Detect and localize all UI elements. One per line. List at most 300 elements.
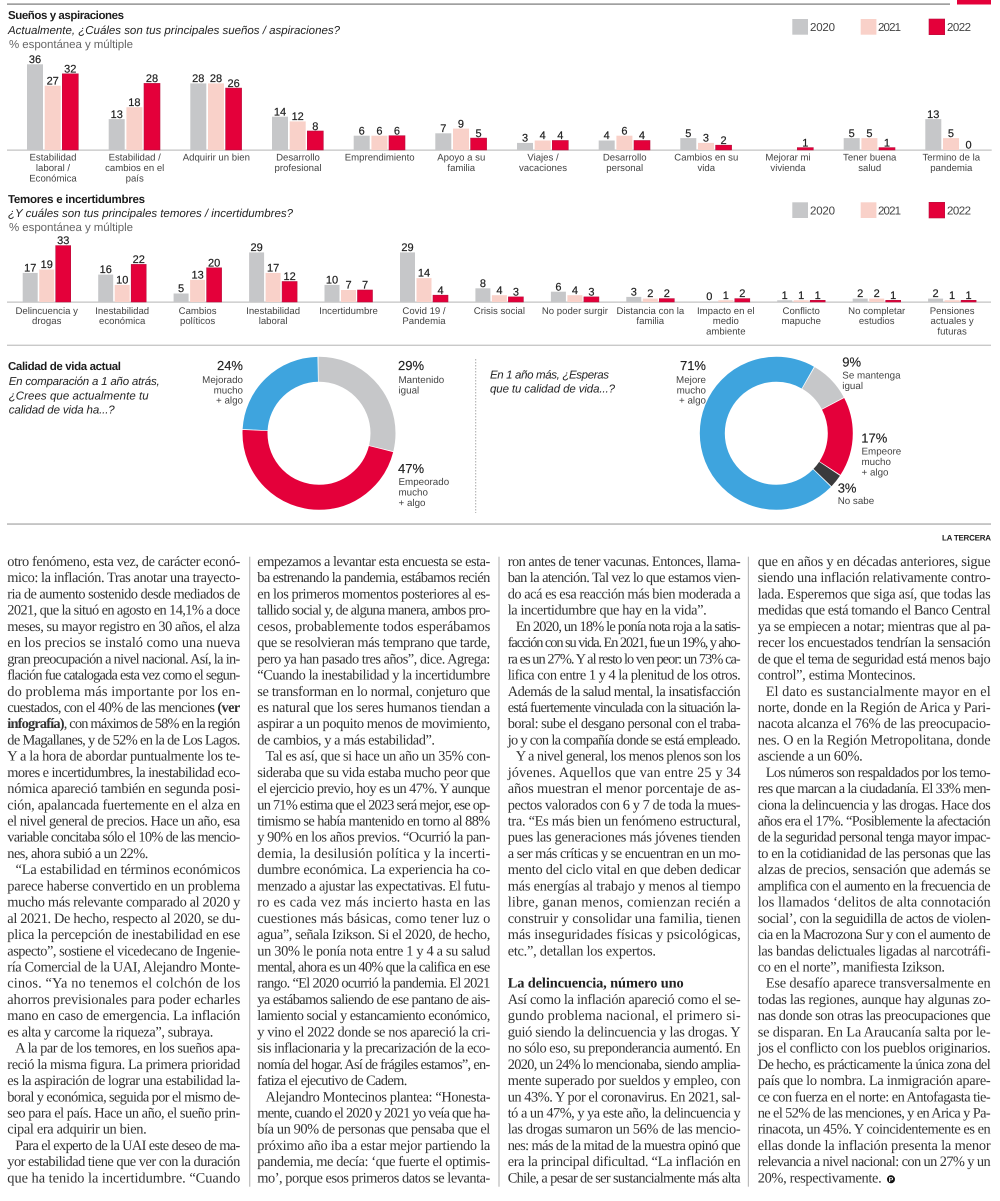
bars: Termino de la pandemia: pandemia (930, 163, 973, 174)
bars: Viajes / vacaciones (517, 130, 568, 174)
label: 24% mejorado: + algo (216, 396, 244, 406)
label: 3% no sabe (838, 480, 875, 507)
bars: Mejorar mi vivienda: Mejorar mi (765, 152, 811, 164)
article column 3: guió siendo la delincuencia y las drogas. Y (508, 1024, 741, 1040)
bars: Desarrollo profesional: profesional (275, 163, 321, 174)
article column 2: mente, cuando el 2020 y 2021 yo veía que ha- (257, 1106, 491, 1122)
heading: temores e incertidumbres: Temores e incertidumbres (8, 194, 145, 206)
bars: Conflicto mapuche (777, 290, 825, 327)
article column 4: siendo una inflación relativamente contro- (758, 570, 991, 586)
article column 1: plica la percepción de inestabilidad en ese (7, 927, 240, 943)
bars: No poder surgir: No poder surgir (542, 306, 609, 317)
red top tab (957, 0, 991, 4)
article column 3: años muestran el menor porcentaje de as- (508, 781, 741, 797)
article column 1: meses, su mayor registro en 30 años, el alza (7, 619, 241, 635)
article column 3: ban la atención. Tal vez lo que estamos vien- (508, 570, 741, 586)
article column 4: nacota alcanza el 76% de las preocupacio- (758, 716, 991, 732)
bars: Adquirir un bien (183, 73, 250, 164)
article column 3: 2020, un 24% lo mencionaba, siendo amplia- (508, 1057, 741, 1073)
article column 2: en los primeros momentos posteriores al es- (257, 586, 491, 602)
bars: Distancia con la familia (616, 286, 685, 327)
article column 3: jóvenes. Aquellos que van entre 25 y 34 (507, 765, 741, 781)
article column 4: Ese desafío aparece transversalmente en (766, 976, 991, 992)
bars: Delincuencia y drogas: 17 (24, 262, 36, 274)
bars: Inestabilidad económica: económica (99, 316, 146, 327)
bars: Covid 19 / Pandemia: Pandemia (402, 316, 446, 327)
donut chart: calidad actual (255, 369, 383, 497)
bars: Estabilidad cambios en el país: cambios en el (105, 163, 164, 174)
article column 4: recer los encuestados tendrían la sensación (758, 635, 991, 651)
bars: Termino de la pandemia: 13 (927, 109, 939, 121)
label: 9% se mantenga: Se mantenga (842, 370, 901, 382)
article column 3 (507, 554, 741, 1186)
bars: Inestabilidad laboral: laboral (259, 316, 288, 327)
article column 3: Así como la inflación apareció como el se- (508, 992, 741, 1008)
article column 1: en los precios se instaló como una nueva (7, 635, 241, 651)
article column 1: es la aspiración de lograr una estabilidad la- (7, 1073, 241, 1089)
article column 2 (257, 554, 491, 1186)
label: 9% se mantenga (842, 354, 901, 392)
article column 2: un 30% le ponía nota entre 1 y 4 a su salud (257, 943, 491, 959)
article column 1: mano en caso de emergencia. La inflación (7, 1008, 240, 1024)
article column 3: más energías al trabajo y menos al tiempo (508, 878, 741, 894)
article column 3: tó a un 47%, y ya este año, la delincuencia y (508, 1106, 741, 1122)
bars: Apoyo a su familia: 9 (458, 118, 464, 130)
bars: No poder surgir (542, 281, 609, 317)
bars: Emprendimiento: Emprendimiento (345, 152, 415, 164)
bars: Estabilidad cambios en el país: Estabilidad / (109, 152, 161, 164)
bars: Conflicto mapuche: 1 (815, 290, 821, 302)
article column 3: boral: sube el desgano personal con el traba- (508, 716, 741, 732)
bars: Termino de la pandemia: 0 (966, 140, 972, 152)
bars: Cambios en su vida: vida (697, 163, 716, 174)
bars: Inestabilidad económica: Inestabilidad (95, 306, 149, 317)
article column 3: pectos valorados con 6 y 7 de toda la mues- (508, 797, 741, 813)
article column 1: parece haberse convertido en un problema (7, 878, 241, 894)
article column 1: “La estabilidad en términos económicos (16, 862, 241, 878)
bars: No completar estudios (848, 288, 906, 327)
label: 17% empeore (861, 430, 902, 478)
article column 2: un 71% estima que el 2023 será mejor, ese op- (257, 797, 491, 813)
label: 29% mantenido (398, 358, 445, 396)
label: 17% empeore: Empeore (862, 446, 902, 458)
bars: Estabilidad laboral: Económica (29, 174, 77, 184)
bars: Mejorar mi vivienda: 1 (802, 137, 808, 149)
article column 1: es alta y carcome la riqueza”, subraya. (7, 1024, 213, 1040)
article column 3: Y a nivel general, los menos plenos son los (516, 749, 741, 765)
legend: sueños: 2020 (810, 22, 835, 34)
article column 3: ra es un 27%. Y al resto lo ven peor: un 73% ca- (508, 651, 741, 667)
label: 47% empeorado: 47% (398, 461, 424, 476)
bars: No completar estudios: 1 (890, 290, 896, 302)
article column 3: lifica con entre 1 y 4 la plenitud de los otros. (508, 668, 741, 684)
article column 1: 2021, que la situó en agosto en 14,1% a doce (7, 603, 240, 619)
heading: sueños y aspiraciones: Sueños y aspiraciones (8, 10, 124, 22)
bars: Viajes / vacaciones: 4 (557, 130, 563, 142)
panel: sueños y aspiraciones (7, 10, 992, 184)
label: 47% empeorado (398, 461, 450, 509)
bars: Estabilidad laboral: laboral / (36, 163, 70, 174)
bars: Desarrollo profesional: Desarrollo (276, 152, 320, 164)
article column 4: las bandas delictuales ligadas al narcotráfi- (758, 943, 991, 959)
subheading: la delincuencia, número uno: La delincuencia, número uno (508, 976, 684, 992)
article column 1: cipal era adquirir un bien. (7, 1122, 147, 1138)
article column 3: libre, ganan menos, comienzan recién a (508, 895, 741, 911)
panel: temores e incertidumbres (7, 194, 991, 338)
bar chart: temores (7, 235, 991, 338)
bars: Inestabilidad laboral (246, 242, 300, 327)
bars: Viajes / vacaciones: vacaciones (519, 163, 567, 174)
article column 2: bía un 90% de personas que pensaba que el (257, 1122, 490, 1138)
label: 24% mejorado: 24% (217, 358, 243, 373)
article column 1: mico: la inflación. Tras anotar una trayecto- (7, 570, 241, 586)
article column 1: mores e incertidumbres, la inestabilidad eco- (7, 765, 241, 781)
article column 3: está fuertemente vinculada con la situación la- (508, 700, 741, 716)
label: 47% empeorado: Empeorado (398, 477, 450, 488)
article column 3: la incertidumbre que hay en la vida”. (508, 603, 707, 619)
article column 4: 20%, respectivamente. (758, 1170, 882, 1186)
article column 2: tallido social y, de alguna manera, ambos pro- (257, 603, 491, 619)
label: 9% se mantenga: igual (842, 381, 863, 392)
bars: Adquirir un bien: 26 (227, 78, 240, 90)
article column 4: que en años y en décadas anteriores, sigue (758, 554, 991, 570)
article column 1: otro fenómeno, esta vez, de carácter econó- (7, 554, 241, 570)
label: 47% empeorado: mucho (398, 488, 428, 498)
label: 17% empeore: mucho (862, 457, 891, 468)
bars: Cambios políticos: 20 (208, 257, 220, 269)
bars: Termino de la pandemia: Termino de la (923, 152, 981, 164)
article column 3: no sólo eso, su preponderancia aumentó. En (508, 1041, 741, 1057)
bars: Distancia con la familia: 2 (664, 288, 670, 300)
bars: Impacto en el medio ambiente: medio (713, 316, 739, 327)
article column 1: ría Comercial de la UAI, Alejandro Monte- (7, 960, 241, 976)
bars: Viajes / vacaciones: 4 (540, 130, 546, 142)
bars: Impacto en el medio ambiente: Impacto en el (697, 306, 755, 317)
icon: end mark: P (889, 1177, 894, 1184)
article column 4: de que el tema de seguridad está menos bajo (758, 651, 991, 667)
article column 4: control”, estima Montecinos. (758, 668, 916, 684)
bars: Pensiones actuales y futuras: 2 (933, 288, 939, 300)
article column 2: pandemia, me decía: ‘que fuerte el optimis- (257, 1154, 491, 1170)
icon: end mark (887, 1175, 895, 1184)
bars: No completar estudios: 2 (874, 288, 880, 300)
article column 4: ya se empiecen a notar; mientras que al pa- (758, 619, 991, 635)
legend: sueños (792, 19, 971, 35)
article column 1: variable concitaba sólo el 10% de las mencio- (7, 830, 241, 846)
bars: Estabilidad cambios en el país: país (126, 174, 144, 184)
bars: Incertidumbre (319, 274, 378, 317)
article column 3: era la principal dificultad. “La inflación en (508, 1154, 741, 1170)
bars: Viajes / vacaciones: 3 (522, 132, 528, 144)
article column 4: amplifica con el aumento en la frecuencia de (758, 878, 991, 894)
credit: la tercera: LA TERCERA (942, 534, 991, 542)
bars: Cambios políticos: 5 (178, 283, 184, 295)
label: 29% mantenido: Mantenido (398, 375, 445, 386)
article column 1: reció la misma figura. La primera prioridad (7, 1057, 241, 1073)
heading: calidad de vida actual: Calidad de vida actual (8, 361, 121, 373)
bars: Estabilidad laboral: Estabilidad (30, 152, 76, 164)
article column 4: ciona la delincuencia y las drogas. Hace dos (758, 797, 991, 813)
article column 4: lada. Esperemos que siga así, que todas las (758, 586, 991, 602)
bars: Emprendimiento: 6 (359, 126, 365, 138)
article column 3: jo y con la compañía donde se está empleado. (507, 732, 741, 748)
bars: Tener buena salud: 5 (849, 128, 855, 140)
bars: Inestabilidad laboral: Inestabilidad (246, 306, 300, 317)
article column 2: y vino el 2022 donde se nos apareció la cri- (257, 1024, 491, 1040)
article column 4: El dato es sustancialmente mayor en el (766, 684, 991, 700)
article column 2: fatiza el ejecutivo de Cadem. (257, 1073, 407, 1089)
bars: Apoyo a su familia (435, 118, 487, 174)
bars: Apoyo a su familia: familia (447, 163, 476, 174)
article column 2: Tal es así, que si hace un año un 35% con- (266, 749, 491, 765)
bars: Estabilidad cambios en el país (105, 73, 164, 184)
article column 4: ellas donde la inflación presenta la menor (758, 1138, 991, 1154)
article column 4: ne el 52% de las menciones, y en Arica y Pa- (758, 1106, 991, 1122)
label: 71% mejore: 71% (680, 358, 706, 373)
article column 3: mente superado por sueldos y empleo, con (508, 1073, 741, 1089)
article column 4: los llamados ‘delitos de alta connotación (758, 895, 991, 911)
bars: Estabilidad laboral: 32 (64, 64, 76, 76)
article column 1: yor estabilidad tiene que ver con la duración (7, 1154, 240, 1170)
article column 2: ba estrenando la pandemia, estábamos recién (257, 570, 490, 586)
bars: No poder surgir: 3 (588, 286, 594, 298)
article column 2: menzado a ajustar las expectativas. El futu- (257, 878, 491, 894)
article column 2: próximo año iba a estar mejor partiendo la (257, 1138, 491, 1154)
article column 3: gundo problema nacional, el primero si- (508, 1008, 741, 1024)
bars: Desarrollo personal: Desarrollo (603, 152, 647, 164)
article column 1: cinos. “Ya no tenemos el colchón de los (7, 976, 241, 992)
article column 4: medidas que está tomando el Banco Central (758, 603, 991, 619)
article column 1: A la par de los temores, en los sueños apa- (15, 1041, 241, 1057)
article column 1 (7, 554, 241, 1186)
article column 4: to en la cotidianidad de las personas que las (758, 846, 991, 862)
bars: Covid 19 / Pandemia: Covid 19 / (402, 306, 446, 317)
bars: Estabilidad cambios en el país: 13 (111, 109, 123, 121)
bars: Inestabilidad laboral: 17 (267, 262, 279, 274)
article column 2: cesos, probablemente todos esperábamos (257, 619, 491, 635)
bars: Tener buena salud (843, 128, 897, 174)
legend: temores: 2020 (810, 206, 835, 218)
bars: Cambios políticos (174, 257, 222, 327)
bars: Estabilidad laboral: 27 (47, 76, 59, 88)
article column 3: más inseguridades físicas y psicológicas, (508, 927, 741, 943)
article column 3: las drogas sumaron un 56% de las mencio- (508, 1122, 741, 1138)
bars: Incertidumbre: 7 (362, 280, 368, 292)
bars: Cambios en su vida: 2 (721, 135, 727, 147)
article column 1: cuestados, con el 40% de las menciones (ver (7, 700, 241, 716)
bars: Mejorar mi vivienda: vivienda (770, 163, 806, 174)
label: 71% mejore: mucho (677, 386, 707, 396)
article column 1: al 2021. De hecho, respecto al 2020, se du- (7, 911, 241, 927)
article column 2: rango. “El 2020 ocurrió la pandemia. El 2021 (257, 976, 490, 992)
article column 3: tra. “Es más bien un fenómeno estructural, (508, 814, 741, 830)
question: calidad de vida actual: En comparación a 1 año atrás, (9, 376, 160, 388)
bars: Cambios en su vida: 5 (685, 128, 691, 140)
article column 1: de Magallanes, y de 52% en la de Los Lagos. (7, 732, 240, 748)
article column 2: cuestiones más básicas, como tener luz o (257, 911, 490, 927)
bars: Estabilidad laboral: 36 (29, 54, 41, 66)
bars: Adquirir un bien: 28 (210, 73, 222, 85)
bars: Distancia con la familia: familia (636, 316, 665, 327)
article column 4: nas donde son otras las preocupaciones que (758, 1008, 991, 1024)
article column 3: do acá es esa reacción más bien moderada a (508, 586, 741, 602)
article column 4: res que marcan a la ciudadanía. El 33% men- (758, 781, 991, 797)
legend: sueños: 2022 (947, 22, 971, 34)
bars: No completar estudios: No completar (848, 306, 906, 317)
legend: temores: 2021 (878, 206, 901, 218)
article column 4: alzas de precios, sensación que además se (758, 862, 991, 878)
article column 4: de la seguridad personal tenga mayor impac- (758, 830, 991, 846)
article column 2: empezamos a levantar esta encuesta se esta- (257, 554, 491, 570)
bars: Pensiones actuales y futuras: Pensiones (930, 306, 975, 317)
article column 2: y 90% en los años previos. “Ocurrió la pan- (257, 830, 491, 846)
label: 3% no sabe: No sabe (838, 496, 875, 507)
article column 2: demia, la desilusión política y la incerti- (257, 846, 491, 862)
bars: Conflicto mapuche: Conflicto (783, 306, 820, 317)
article column 4 (757, 554, 991, 1186)
bars: Adquirir un bien: 28 (192, 73, 204, 85)
note: temores: % espontánea y múltiple (9, 222, 133, 234)
bars: Incertidumbre: 7 (345, 280, 352, 292)
bars: Apoyo a su familia: Apoyo a su (437, 152, 485, 164)
label: 9% se mantenga: 9% (842, 354, 862, 370)
bars: Tener buena salud: salud (858, 163, 881, 174)
article column 2: que se resolvieran más temprano que tarde, (257, 635, 490, 651)
article column 2: agua”, señala Izikson. Si el 2020, de hecho, (257, 927, 490, 943)
bars: Pensiones actuales y futuras: futuras (937, 326, 967, 338)
article column 1: do problema más importante por los en- (7, 684, 241, 700)
bars: Desarrollo personal: 4 (639, 130, 645, 142)
article column 3: ron antes de tener vacunas. Entonces, llama- (508, 554, 741, 570)
article column 1: el nivel general de precios. Hace un año, esa (7, 814, 241, 830)
article column 1: flación fue catalogada esta vez como el segun- (7, 668, 241, 684)
bars: Delincuencia y drogas: 33 (57, 235, 69, 247)
bars: No poder surgir: 6 (555, 281, 561, 293)
article column 3: Además de la salud mental, la insatisfacción (508, 684, 741, 700)
article column 2: pero ya han pasado tres años”, dice. Agrega: (257, 651, 490, 667)
bars: Termino de la pandemia: 5 (948, 128, 954, 140)
question: en 1 año más: En 1 año más, ¿Esperas (490, 370, 609, 382)
bars: Pensiones actuales y futuras: 1 (966, 290, 972, 302)
article column 1: nes, ahora subió a un 22%. (7, 846, 148, 862)
article column 2: sis inflacionaria y la precarización de la eco- (257, 1041, 491, 1057)
bars: Cambios políticos: 13 (191, 269, 204, 281)
bars: Conflicto mapuche: mapuche (781, 316, 821, 327)
article column 1: mucho más relevante comparado al 2020 y (7, 895, 241, 911)
bars: Inestabilidad laboral: 12 (283, 271, 296, 283)
article column 1: boral y económica, seguida por el mismo de- (7, 1089, 241, 1105)
bars: Pensiones actuales y futuras: actuales y (930, 316, 974, 327)
bars: Distancia con la familia: 3 (631, 286, 637, 298)
article column 4: rinacota, un 45%. Y coincidentemente es en (758, 1122, 991, 1138)
bars: Delincuencia y drogas: drogas (32, 316, 62, 327)
bars: Conflicto mapuche: 1 (798, 290, 804, 302)
question: calidad de vida actual: ¿Crees que actualmente tu (9, 390, 149, 402)
bars: Covid 19 / Pandemia: 29 (401, 242, 414, 254)
label: 71% mejore: + algo (679, 396, 707, 406)
label: 71% mejore (676, 358, 707, 406)
article column 3: etc.”, detallan los expertos. (508, 943, 656, 959)
panel: calidad de vida en 1 año (490, 354, 902, 507)
article column 3: nes: más de la mitad de la muestra opinó que (508, 1138, 741, 1154)
bars: Incertidumbre: Incertidumbre (319, 306, 378, 317)
bars: Distancia con la familia: 2 (647, 288, 653, 300)
bars: Crisis social: Crisis social (474, 306, 525, 317)
bars: Pensiones actuales y futuras (928, 288, 976, 338)
bars: Tener buena salud: 1 (884, 137, 890, 149)
article column 4: relevancia a nivel nacional: con un 27% y un (758, 1154, 991, 1170)
legend: temores (792, 202, 971, 218)
legend: sueños: 2021 (878, 22, 901, 34)
article column 2: “Cuando la inestabilidad y la incertidumbre (257, 668, 490, 684)
article column 2: de cambios, y a más estabilidad”. (257, 732, 435, 748)
article column 4: se disparan. En La Araucanía salta por le- (758, 1024, 991, 1040)
bars: Inestabilidad económica: 22 (133, 254, 145, 266)
bars: Desarrollo profesional: 14 (274, 106, 286, 118)
bars: Termino de la pandemia (923, 109, 981, 174)
article column 1: Para el experto de la UAI este deseo de ma- (15, 1138, 241, 1154)
bars: Delincuencia y drogas: Delincuencia y (15, 306, 78, 317)
article column 1: seo para el país. Hace un año, el sueño prin- (7, 1106, 241, 1122)
bars: Impacto en el medio ambiente (697, 288, 755, 338)
article column 4: social’, con la seguidilla de actos de violen- (758, 911, 991, 927)
bar chart: sueños (7, 54, 992, 184)
article column 3: mento del ciclo vital en que deben dedicar (508, 862, 741, 878)
bars: Emprendimiento (345, 126, 415, 164)
bars: No completar estudios: 2 (857, 288, 863, 300)
article column 4: país que lo nombra. La inmigración apare- (758, 1073, 991, 1089)
panel: calidad de vida actual (8, 358, 450, 509)
bars: Adquirir un bien: Adquirir un bien (183, 152, 250, 164)
article column 3: En 2020, un 18% le ponía nota roja a la satis- (516, 619, 741, 635)
bars: Covid 19 / Pandemia (400, 242, 448, 327)
article column 1: ción, apalancada fuertemente en el alza en (7, 797, 240, 813)
article column 4: De hecho, es prácticamente la única zona del (758, 1057, 991, 1073)
bars: Desarrollo personal: 4 (604, 130, 610, 142)
article column 4: Los números son respaldados por los temo- (766, 765, 991, 781)
bars: Desarrollo profesional: 12 (292, 111, 304, 123)
article column 2: mental, ahora es un 40% que la califica en ese (257, 960, 490, 976)
bars: Tener buena salud: 5 (866, 128, 872, 140)
bars: Cambios en su vida (674, 128, 738, 174)
bars: Inestabilidad laboral: 29 (250, 242, 263, 254)
bars: Desarrollo personal (599, 126, 650, 174)
note: sueños: % espontánea y múltiple (9, 39, 133, 51)
article column 2: el ejercicio previo, hoy es un 47%. Y aunque (257, 781, 490, 797)
question: sueños: Actualmente, ¿Cuáles son tus principales sueños / aspiraciones? (7, 25, 341, 37)
bars: Impacto en el medio ambiente: 0 (706, 291, 712, 303)
article column 4: todas las regiones, aunque hay algunas zo- (758, 992, 991, 1008)
article column 1: infografía), con máximos de 58% en la región (7, 716, 240, 732)
question: calidad de vida actual (9, 376, 160, 416)
bars: Inestabilidad económica (95, 254, 149, 327)
article column 4: jos el conflicto con los pueblos originarios. (757, 1041, 991, 1057)
article column 1: nómica apareció también en segunda posi- (7, 781, 241, 797)
bars: Covid 19 / Pandemia: 4 (437, 285, 444, 297)
bars: Cambios en su vida: Cambios en su (674, 152, 738, 164)
article column 4: asciende a un 60%. (758, 749, 863, 765)
bars: Pensiones actuales y futuras: 1 (949, 290, 955, 302)
bars: Inestabilidad económica: 10 (116, 274, 128, 286)
bars: Desarrollo profesional: 8 (312, 121, 318, 133)
bars: Inestabilidad económica: 16 (100, 264, 112, 276)
bars: Desarrollo personal: personal (606, 163, 643, 174)
article column 3: pues las generaciones más jóvenes tienden (508, 830, 741, 846)
bars: Impacto en el medio ambiente: 1 (723, 290, 729, 302)
article column 2: ro es cada vez más incierto hasta en las (257, 895, 491, 911)
bars: Crisis social: 4 (496, 285, 502, 297)
article column 2: sideraba que su vida estaba mucho peor que (257, 765, 490, 781)
